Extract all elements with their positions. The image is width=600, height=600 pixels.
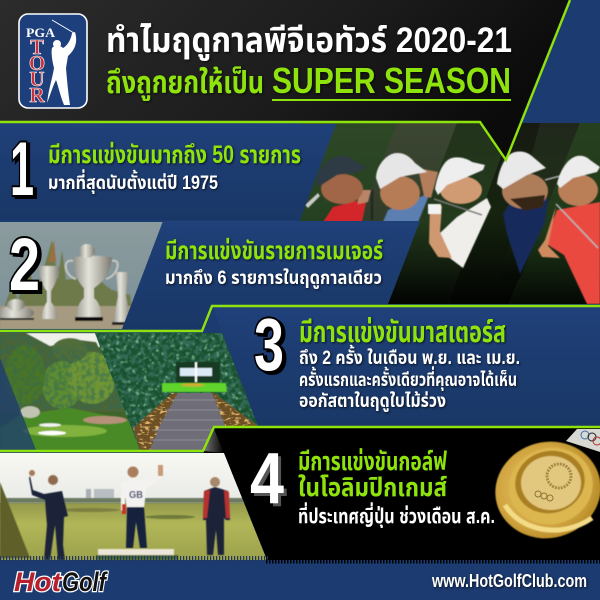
logo: PGA Tour: U — [29, 67, 45, 91]
clubhouse — [162, 362, 227, 392]
number 2: 2 — [9, 223, 40, 306]
item 2 text: มากถึง 6 รายการในฤดูกาลเดียว — [165, 268, 382, 289]
athlete: left — [29, 470, 68, 560]
panel: item 2 background — [122, 221, 420, 329]
athlete: right — [203, 477, 230, 555]
podium — [98, 549, 174, 555]
title highlight: SUPER SEASON: SUPER SEASON — [272, 60, 511, 101]
panel: item 3 background — [213, 308, 600, 426]
item 2 heading: มีการแข่งขันรายการเมเจอร์ — [165, 237, 383, 265]
panel: item 2 photo of trophies — [0, 222, 170, 332]
item 3 line 3: ออกัสตาในฤดูใบไม้ร่วง — [299, 390, 446, 412]
panel: header — [0, 0, 570, 160]
item 1 heading: มีการแข่งขันมากถึง 50 รายการ — [48, 141, 301, 169]
item 3-4 divider — [0, 427, 600, 451]
item 3 heading: มีการแข่งขันมาสเตอร์ส — [299, 317, 506, 349]
logo: PGA Tour: R — [29, 83, 45, 107]
item 4 heading line 1: มีการแข่งขันกอล์ฟ — [298, 446, 447, 476]
item 3 line 1: ถึง 2 ครั้ง ในเดือน พ.ย. และ เม.ย. — [299, 345, 520, 369]
golfer: navy shirt — [497, 151, 560, 274]
trophies — [0, 244, 131, 322]
item 3 line 2: ครั้งแรกและครั้งเดียวที่คุณอาจได้เห็น — [299, 366, 517, 391]
golfer: red-orange shirt — [538, 156, 600, 304]
panel: golfers photo strip — [300, 123, 600, 304]
grass edge: photo side — [0, 556, 268, 562]
number 4: 4 — [250, 439, 284, 519]
golfer: red shirt — [305, 156, 371, 222]
golfer: white shirt — [428, 157, 491, 268]
logo: HotGolf — [14, 567, 108, 597]
item 4 heading line 2: ในโอลิมปิกเกมส์ — [298, 472, 447, 502]
panel: header corner blue — [524, 0, 600, 122]
title line 2: ถึงถูกยกให้เป็น — [106, 65, 264, 101]
panel: item 4 background — [203, 428, 600, 562]
logo: PGA Tour: O — [29, 51, 45, 75]
lawn — [162, 383, 227, 392]
panel: item 1 background — [0, 124, 336, 220]
plants — [5, 240, 132, 310]
panel: item 4 photo of podium — [0, 453, 270, 563]
golfer: blue shirt — [371, 153, 438, 222]
panel: item 3 photo of Augusta — [0, 333, 260, 453]
item 2-3 divider — [0, 306, 600, 331]
title line 1: ทำไมฤดูกาลพีจีเอทัวร์ 2020-21 — [106, 21, 512, 61]
athlete: centre: GB — [129, 490, 143, 501]
logo: PGA Tour: PGA — [26, 25, 56, 40]
number 3: 3 — [254, 303, 284, 386]
item 1 text: มากที่สุดนับตั้งแต่ปี 1975 — [48, 169, 218, 194]
header outline — [0, 0, 570, 160]
number 1: 1 — [10, 127, 34, 212]
corner accent — [204, 429, 224, 453]
logo: PGA Tour — [19, 14, 87, 108]
tree avenue — [95, 333, 258, 450]
logo: HotGolf: Golf — [62, 567, 108, 597]
blue overlay triangle — [0, 358, 36, 450]
athlete: centre — [121, 465, 163, 548]
panel: footer — [0, 560, 600, 600]
item 4 text: ที่ประเทศญี่ปุ่น ช่วงเดือน ส.ค. — [298, 502, 495, 528]
icon: gold medal — [494, 429, 600, 540]
logo: HotGolf: Hot — [14, 567, 62, 597]
logo: PGA Tour: T — [30, 35, 44, 59]
leaves path — [133, 393, 258, 450]
grass edge: black side — [266, 558, 600, 564]
